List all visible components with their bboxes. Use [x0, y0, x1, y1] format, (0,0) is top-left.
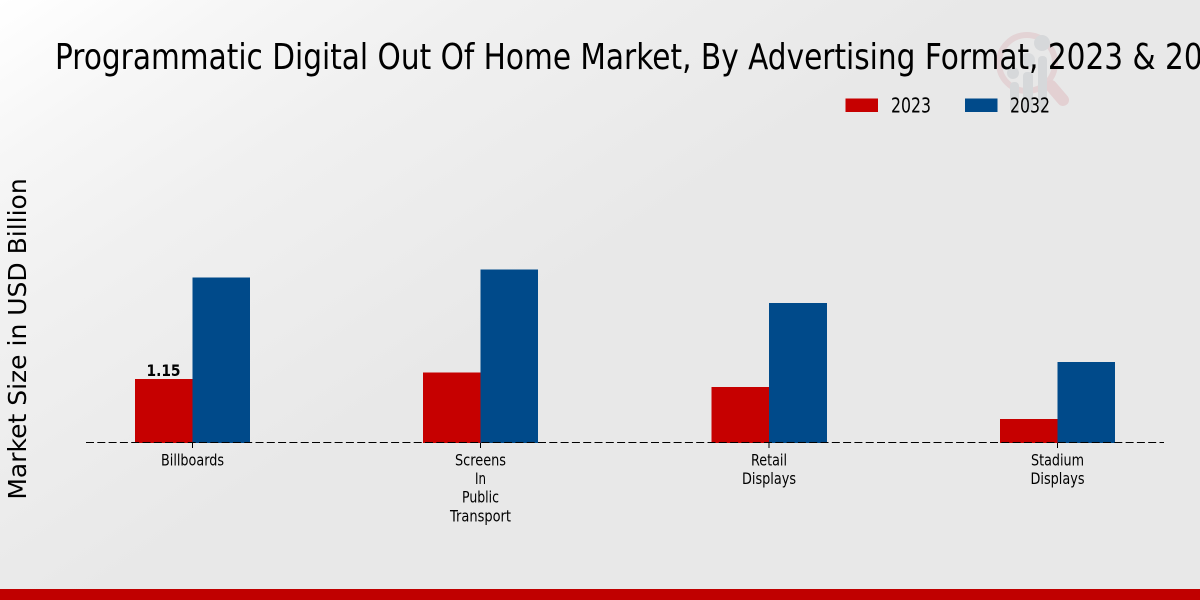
category label: Retail Displays — [742, 450, 796, 488]
legend — [846, 94, 1050, 118]
category label: Stadium Displays: Displays — [1030, 469, 1084, 488]
value label: 1.15: 1.15 — [146, 361, 180, 380]
legend item: 2023: 2023 — [891, 94, 931, 118]
bar chart — [86, 270, 1164, 526]
bars: Retail Displays — [712, 303, 827, 443]
legend item: 2032: 2032 — [1010, 94, 1050, 118]
category label: Screens In Public Transport: In — [475, 469, 486, 488]
category label: Retail Displays: Retail — [751, 450, 787, 470]
footer bar — [0, 589, 1200, 600]
legend item: 2023 — [846, 94, 931, 118]
y axis label: Market Size in USD Billion — [3, 178, 32, 500]
legend item: 2032 — [965, 94, 1050, 118]
category label: Screens In Public Transport: Transport — [449, 506, 511, 526]
bars: Screens In Public Transport — [423, 270, 538, 443]
category label: Screens In Public Transport: Public — [462, 488, 499, 506]
icon: watermark logo — [999, 35, 1063, 112]
category label: Billboards: Billboards — [161, 450, 224, 470]
category label: Retail Displays: Displays — [742, 469, 796, 488]
category label: Stadium Displays: Stadium — [1031, 450, 1084, 470]
category label: Screens In Public Transport: Screens — [455, 450, 506, 470]
category label: Screens In Public Transport — [449, 450, 511, 526]
bars: Stadium Displays — [1000, 362, 1115, 443]
bars: Billboards — [135, 278, 250, 443]
category label: Stadium Displays — [1030, 450, 1084, 488]
